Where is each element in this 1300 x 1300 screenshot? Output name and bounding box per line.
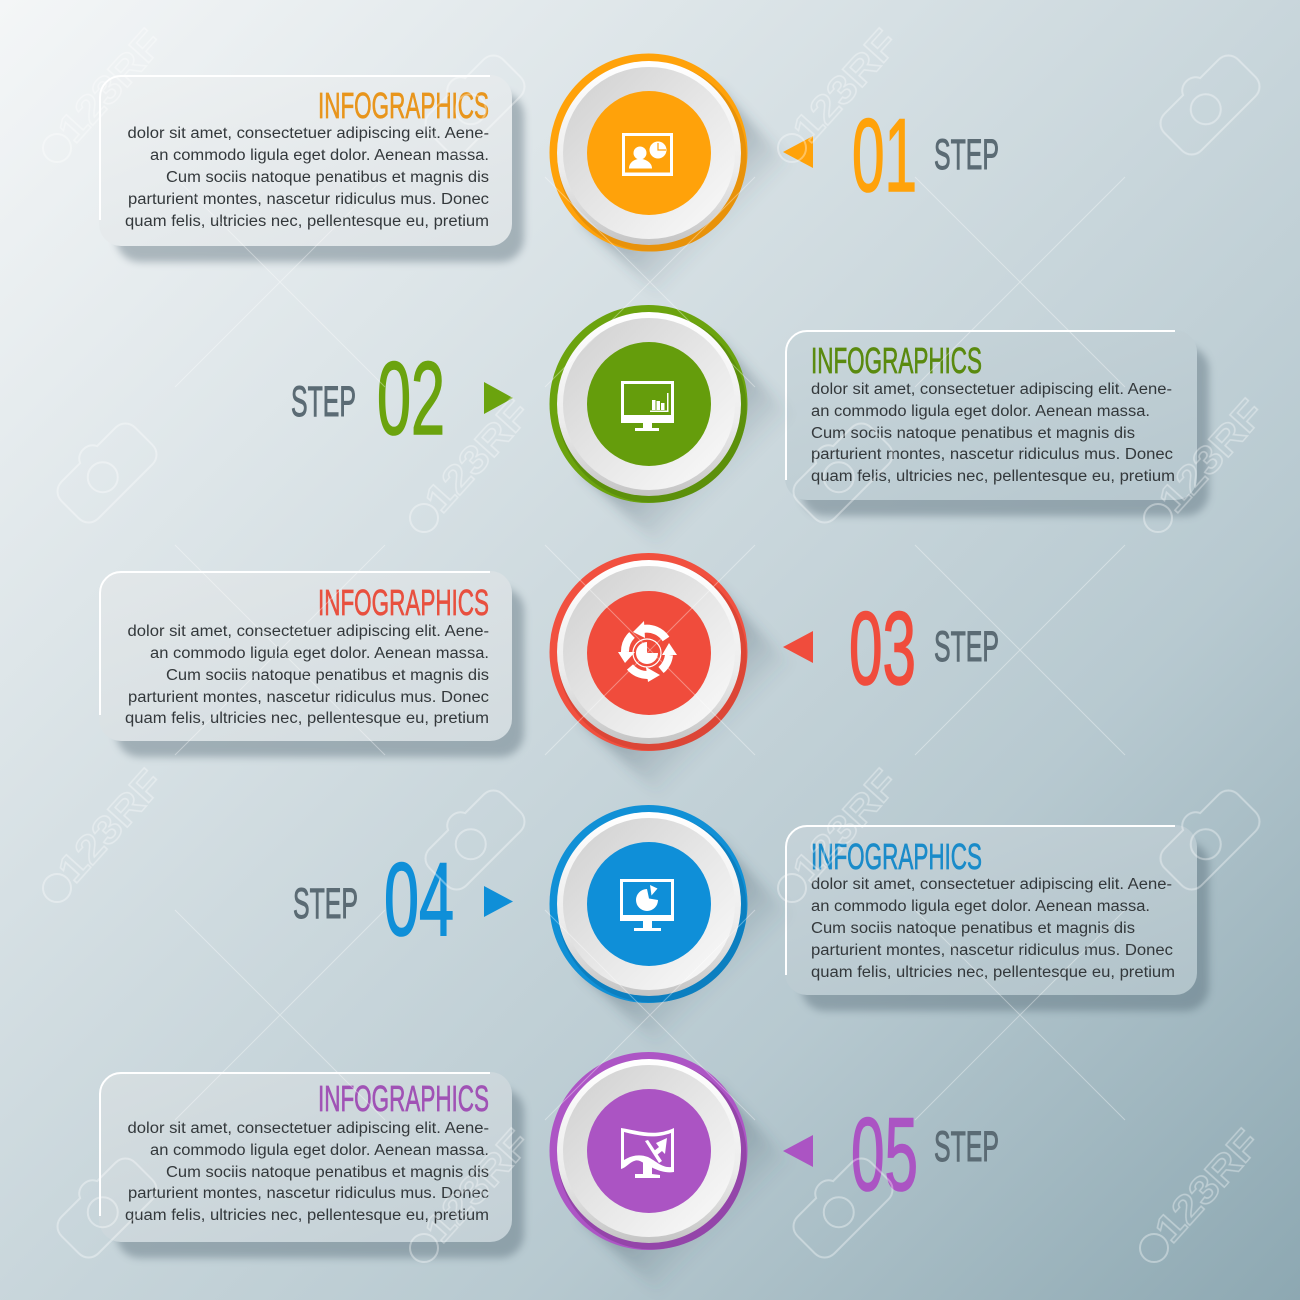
step 1 label with arrow xyxy=(783,98,999,214)
body text: parturient montes, nascetur ridiculus mus. Donec xyxy=(128,191,489,208)
icon: monitor with bar chart xyxy=(621,381,674,431)
step word: STEP xyxy=(291,378,356,426)
step 3 label with arrow xyxy=(783,591,999,707)
arrow xyxy=(484,886,513,917)
body text: an commodo ligula eget dolor. Aenean massa. xyxy=(150,1142,489,1159)
watermark overlay: 123RF xyxy=(417,392,539,521)
body text: quam felis, ultricies nec, pellentesque eu, pretium xyxy=(125,710,489,727)
body text: Cum sociis natoque penatibus et magnis dis xyxy=(811,920,1135,937)
body text xyxy=(811,876,1175,981)
step word: STEP xyxy=(934,131,999,179)
step word: STEP xyxy=(293,880,358,928)
body text xyxy=(125,623,489,727)
heading: INFOGRAPHICS xyxy=(811,836,982,877)
body text xyxy=(811,381,1175,485)
panel 5: left text card xyxy=(99,1072,524,1258)
number: 02 xyxy=(377,341,445,457)
body text: parturient montes, nascetur ridiculus mus. Donec xyxy=(811,446,1173,463)
body text: an commodo ligula eget dolor. Aenean massa. xyxy=(811,898,1150,915)
panel 2: right text card xyxy=(785,330,1209,516)
body text: quam felis, ultricies nec, pellentesque eu, pretium xyxy=(125,1207,489,1224)
arrow xyxy=(783,631,813,663)
step 4 badge xyxy=(550,805,795,1051)
panel 3: left text card xyxy=(99,571,524,757)
body text: dolor sit amet, consectetuer adipiscing elit. Aene- xyxy=(811,381,1172,398)
arrow xyxy=(484,382,513,414)
body text: dolor sit amet, consectetuer adipiscing elit. Aene- xyxy=(128,125,489,142)
step 3 badge xyxy=(550,553,795,800)
watermark overlay: 123RF xyxy=(785,22,907,151)
body text: quam felis, ultricies nec, pellentesque eu, pretium xyxy=(125,213,489,230)
arrow xyxy=(783,136,813,168)
heading: INFOGRAPHICS xyxy=(811,340,982,381)
watermark overlay: 123RF xyxy=(50,22,172,151)
icon: circular arrows with pie chart xyxy=(618,621,677,682)
body text: an commodo ligula eget dolor. Aenean massa. xyxy=(150,645,489,662)
body text: Cum sociis natoque penatibus et magnis dis xyxy=(811,425,1135,442)
number: 05 xyxy=(851,1097,918,1213)
watermark overlay: 123RF xyxy=(50,762,172,891)
number: 04 xyxy=(384,842,454,958)
arrow xyxy=(783,1135,813,1167)
step word: STEP xyxy=(934,623,999,671)
step 4 label with arrow xyxy=(293,842,513,958)
number: 03 xyxy=(849,591,916,707)
heading: INFOGRAPHICS xyxy=(318,1078,489,1119)
body text xyxy=(125,1120,489,1224)
icon: monitor with pie chart xyxy=(620,879,674,931)
step 1 badge xyxy=(550,54,795,300)
body text: dolor sit amet, consectetuer adipiscing elit. Aene- xyxy=(128,1120,489,1137)
watermark overlay: 123RF xyxy=(1151,392,1273,521)
body text: quam felis, ultricies nec, pellentesque eu, pretium xyxy=(811,468,1175,485)
body text xyxy=(125,125,489,230)
watermark overlay: 123RF xyxy=(1147,1122,1269,1251)
step 2 badge xyxy=(550,305,795,551)
number: 01 xyxy=(852,98,917,214)
body text: Cum sociis natoque penatibus et magnis dis xyxy=(166,667,489,684)
panel 1: left text card xyxy=(99,75,524,262)
icon: tablet with person and pie chart xyxy=(622,133,673,176)
watermark overlay: 123RF xyxy=(417,1122,539,1251)
body text: quam felis, ultricies nec, pellentesque eu, pretium xyxy=(811,964,1175,981)
heading: INFOGRAPHICS xyxy=(318,85,489,126)
step 2 label with arrow xyxy=(291,341,513,457)
icon: curved monitor with arrow xyxy=(621,1128,674,1178)
body text: parturient montes, nascetur ridiculus mus. Donec xyxy=(128,1185,489,1202)
body text: an commodo ligula eget dolor. Aenean massa. xyxy=(150,147,489,164)
step word: STEP xyxy=(934,1123,999,1171)
body text: dolor sit amet, consectetuer adipiscing elit. Aene- xyxy=(811,876,1172,893)
heading: INFOGRAPHICS xyxy=(318,582,489,623)
panel 4: right text card xyxy=(785,825,1209,1011)
body text: dolor sit amet, consectetuer adipiscing elit. Aene- xyxy=(128,623,489,640)
step 5 badge xyxy=(550,1052,795,1298)
body text: parturient montes, nascetur ridiculus mus. Donec xyxy=(811,942,1173,959)
body text: an commodo ligula eget dolor. Aenean massa. xyxy=(811,403,1150,420)
watermark overlay: 123RF xyxy=(785,762,907,891)
step 5 label with arrow xyxy=(783,1097,999,1213)
body text: Cum sociis natoque penatibus et magnis dis xyxy=(166,169,489,186)
body text: Cum sociis natoque penatibus et magnis dis xyxy=(166,1164,489,1181)
body text: parturient montes, nascetur ridiculus mus. Donec xyxy=(128,689,489,706)
